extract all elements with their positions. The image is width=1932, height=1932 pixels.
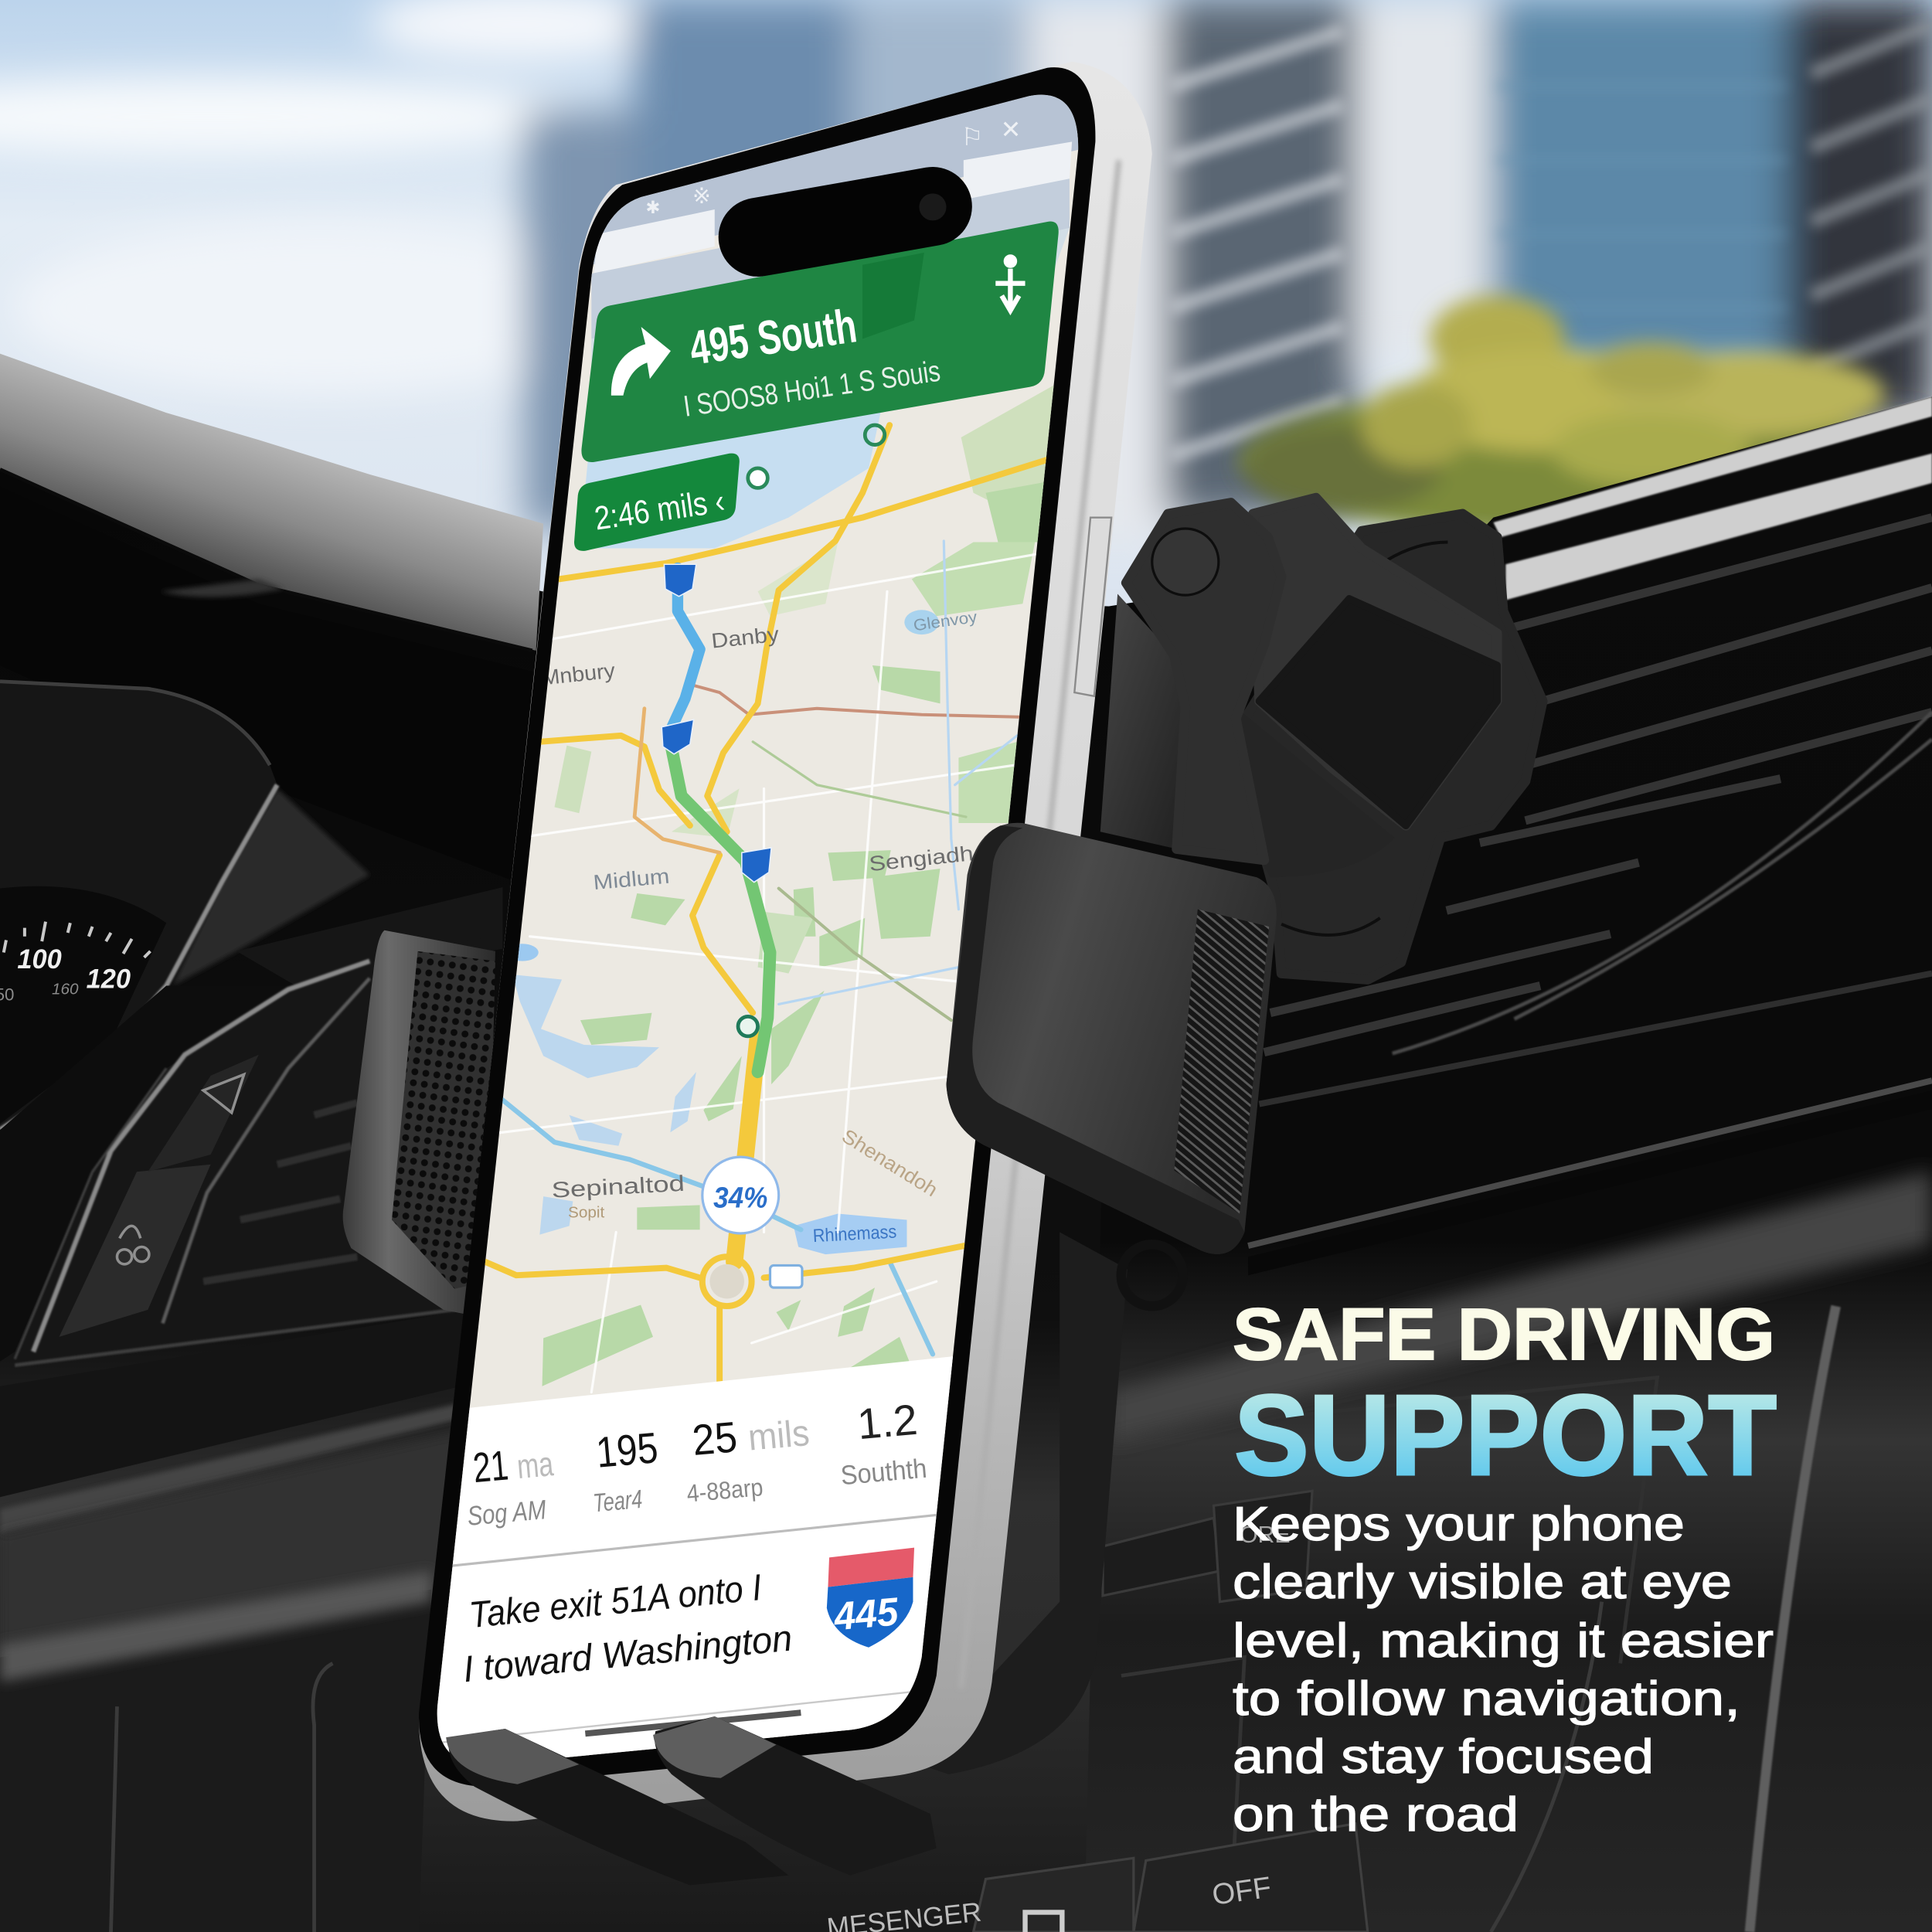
map labels: Rhinemass <box>812 1222 897 1247</box>
right dashboard with air vent <box>825 396 1932 1932</box>
left dashboard <box>0 354 543 1932</box>
distance pill <box>574 454 740 551</box>
background: sky and blurred buildings <box>0 0 1932 641</box>
body text <box>1233 1498 1774 1842</box>
map labels: Sopit <box>568 1203 604 1221</box>
trip stats: 1.2 <box>855 1395 920 1448</box>
map labels: Sepinaltod <box>551 1172 685 1203</box>
vent mount with ball joint <box>912 498 1543 1774</box>
trip stats: 195 <box>594 1423 660 1477</box>
swivel disc <box>1240 713 1395 877</box>
trip stats: 4-88arp <box>685 1473 764 1508</box>
status icons: ⚐ <box>961 123 983 151</box>
body text: to follow navigation, <box>1233 1672 1740 1726</box>
trip stats: 21 ma <box>471 1438 555 1492</box>
body text: on the road <box>1233 1788 1519 1842</box>
body text: clearly visible at eye <box>1233 1556 1732 1609</box>
speedometer <box>0 886 166 1124</box>
map roads <box>479 425 1060 1393</box>
icon: bezel buttons <box>117 1074 244 1264</box>
control label: window button: ORE <box>1240 1522 1291 1548</box>
map labels: Shenandoh <box>838 1125 941 1201</box>
trip stats: Southth <box>839 1454 928 1491</box>
body text: Keeps your phone <box>1233 1498 1685 1551</box>
map labels <box>540 608 979 1247</box>
interstate shield: 445 <box>832 1589 900 1638</box>
map labels: Danby <box>710 622 781 653</box>
right phone clamp <box>946 823 1277 1254</box>
left phone clamp <box>343 930 495 1318</box>
status icons: ✕ <box>1001 116 1021 144</box>
map labels: Glenvoy <box>913 608 979 634</box>
instruction text <box>461 1567 794 1690</box>
body text: level, making it easier <box>1233 1614 1774 1668</box>
instruction text: I toward Washington <box>461 1618 794 1690</box>
lower phone arm <box>912 1232 1128 1774</box>
trip stats: Tear4 <box>592 1485 644 1518</box>
lower panels <box>0 986 296 1362</box>
progress badge <box>702 1157 779 1233</box>
interstate shield <box>827 1548 914 1648</box>
instruction text: Take exit 51A onto I <box>468 1567 764 1636</box>
map labels: Mnbury <box>540 658 617 689</box>
progress badge: 34% <box>713 1182 767 1215</box>
speedometer: 120 <box>87 964 131 995</box>
mount knob <box>1152 529 1219 595</box>
back plate <box>1232 514 1543 980</box>
top translucent window reflection <box>594 94 1079 264</box>
trip stats: 25 mils <box>690 1406 811 1464</box>
phone <box>406 62 1152 1821</box>
instrument hood <box>0 682 277 1130</box>
heading: support: SUPPORT <box>1234 1372 1777 1499</box>
phone bottom feet <box>446 1716 937 1885</box>
map labels: Midlum <box>592 864 671 894</box>
mount arm <box>1100 594 1185 849</box>
direction text: 495 South <box>686 299 860 376</box>
trip stats <box>468 1405 926 1529</box>
distance pill: 2:46 mils ‹ <box>592 482 726 537</box>
dashboard base <box>0 400 1932 1932</box>
icon: turn arrow <box>612 330 669 394</box>
phone screen <box>437 94 1079 1757</box>
map labels: Sengiadh <box>868 841 975 876</box>
status icons <box>647 122 1019 213</box>
map water <box>506 382 939 1254</box>
control label: off: OFF <box>1210 1871 1273 1912</box>
status icons: ※ <box>692 184 711 209</box>
bottom info panel <box>437 1356 954 1757</box>
speedometer: 100 <box>17 944 62 975</box>
map base <box>437 94 1079 1757</box>
body text: and stay focused <box>1233 1730 1654 1784</box>
map parks <box>543 382 1060 1386</box>
air vent bezel <box>15 937 493 1366</box>
camera pill <box>713 161 978 283</box>
ball joint block <box>1253 498 1497 825</box>
phone side button <box>1074 518 1111 696</box>
phone silver frame <box>419 62 1152 1821</box>
icon: person down arrow <box>995 255 1026 311</box>
phone black bezel <box>419 67 1095 1787</box>
heading: safe driving: SAFE DRIVING <box>1233 1294 1775 1376</box>
speedometer: 160 <box>52 981 79 998</box>
route badges <box>662 564 802 1287</box>
direction subtext: I SOOS8 Hoi1 1 S Souis <box>682 355 942 423</box>
trip stats: Sog AM <box>466 1495 548 1532</box>
navigation sign <box>581 222 1059 462</box>
status icons: ✱ <box>645 198 660 217</box>
